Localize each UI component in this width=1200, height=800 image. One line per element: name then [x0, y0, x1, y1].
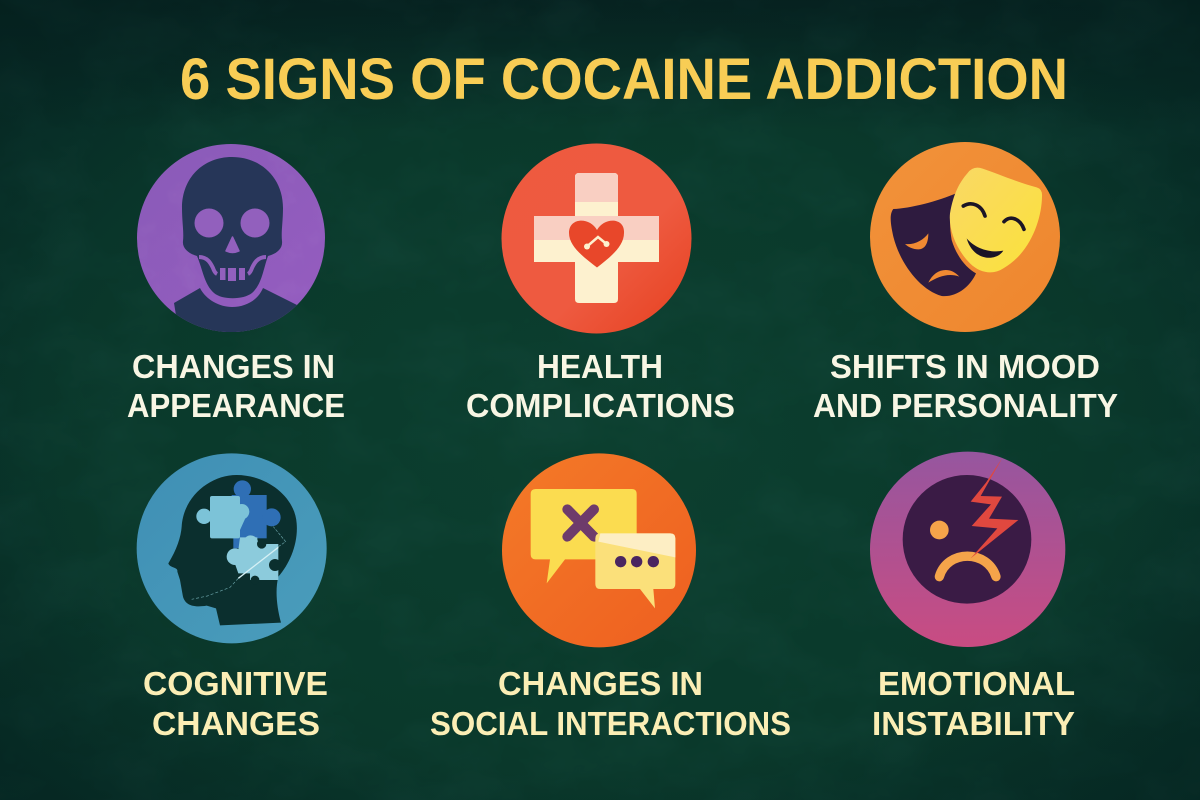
label: shifts in mood and personality: AND PERSONALITY: [813, 387, 1118, 424]
icon: head with puzzle pieces: [137, 453, 327, 643]
label: emotional instability: [872, 665, 1075, 742]
label: shifts in mood and personality: [813, 348, 1118, 424]
label: cognitive changes: COGNITIVE: [143, 665, 328, 702]
panel: health complications: [466, 144, 735, 424]
label: health complications: HEALTH: [537, 348, 663, 385]
title: 6 SIGNS OF COCAINE ADDICTION: [180, 47, 1068, 112]
label: cognitive changes: CHANGES: [152, 705, 320, 742]
label: changes in social interactions: SOCIAL INTERACTIONS: [430, 705, 791, 742]
label: changes in social interactions: [430, 665, 791, 742]
label: cognitive changes: [143, 665, 328, 742]
label: changes in social interactions: CHANGES IN: [498, 665, 703, 702]
panel: changes in social interactions: [430, 453, 791, 742]
label: health complications: COMPLICATIONS: [466, 387, 735, 424]
label: emotional instability: INSTABILITY: [872, 705, 1075, 742]
icon: skull: [137, 144, 325, 340]
label: emotional instability: EMOTIONAL: [878, 665, 1075, 702]
label: changes in appearance: APPEARANCE: [127, 387, 345, 424]
panel: shifts in mood and personality: [813, 142, 1118, 424]
label: changes in appearance: [127, 348, 345, 424]
panel: changes in appearance: [127, 144, 345, 424]
label: health complications: [466, 348, 735, 424]
panel: cognitive changes: [137, 453, 328, 742]
label: shifts in mood and personality: SHIFTS IN MOOD: [830, 348, 1100, 385]
icon: medical cross with heart: [502, 144, 692, 334]
icon: theatre masks: [870, 142, 1060, 332]
panel: emotional instability: [870, 452, 1075, 742]
icon: sad face with lightning bolt: [870, 452, 1065, 647]
icon: speech bubbles: [502, 453, 696, 647]
label: changes in appearance: CHANGES IN: [132, 348, 335, 385]
